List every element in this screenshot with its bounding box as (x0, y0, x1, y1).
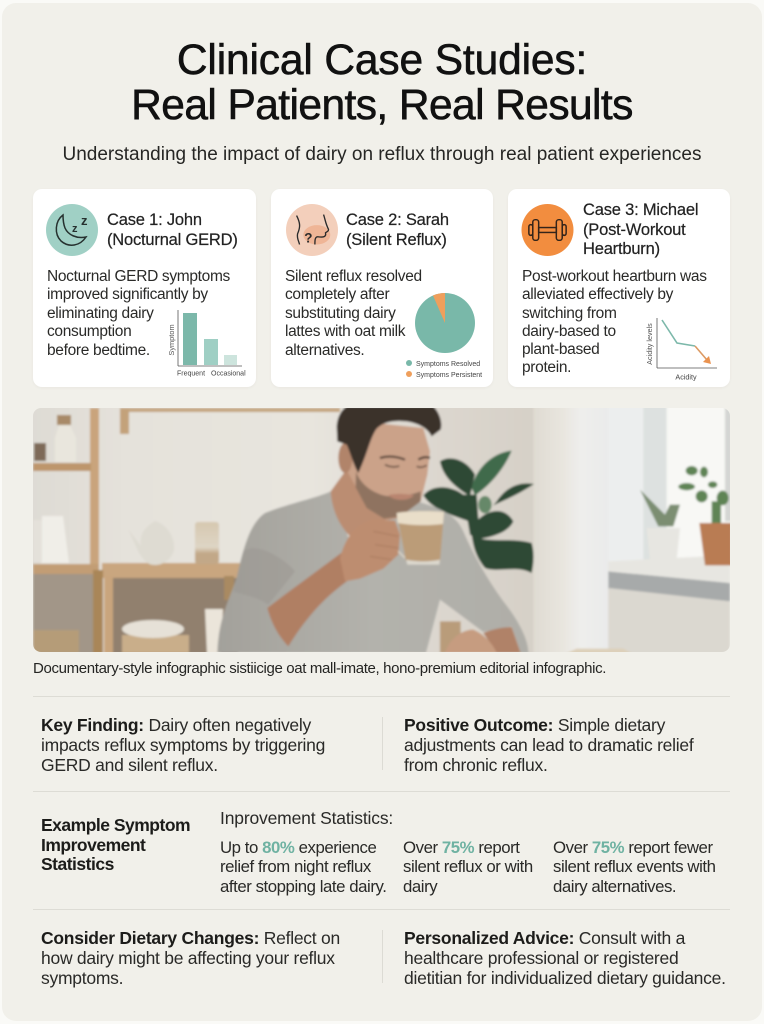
consider dietary changes: Consider Dietary Changes: Reflect on (41, 928, 340, 948)
panel: case 3 (508, 189, 730, 387)
case 2 text: completely after (285, 286, 389, 303)
line chart: acidity: Acidity (675, 372, 697, 382)
section: symptom statistics (41, 815, 190, 874)
case 2 heading: (Silent Reflux) (346, 230, 447, 248)
icon: throat profile: ? (304, 231, 313, 246)
personalized advice (404, 928, 726, 988)
case 3 text: switching from (522, 304, 617, 322)
statistic: 75 percent silent reflux: silent reflux or with (403, 857, 533, 876)
photo caption: Documentary-style infographic sistiicige oat mall-imate, hono-premium editorial infographic. (33, 660, 606, 677)
icon: throat profile (286, 204, 338, 256)
case 3 text: dairy-based to (522, 323, 616, 340)
positive outcome: adjustments can lead to dramatic relief (404, 735, 693, 755)
panel: case 1 (33, 189, 256, 387)
title (131, 37, 633, 129)
icon: moon and sleep: z (81, 213, 88, 228)
case 2 text: Silent reflux resolved (285, 268, 422, 285)
case 3 text (522, 268, 707, 376)
case 3 heading: Heartburn) (583, 240, 660, 258)
statistic: 75 percent silent reflux (403, 838, 533, 896)
positive outcome: Positive Outcome: Simple dietary (404, 715, 665, 735)
section: symptom statistics: Improvement (41, 835, 145, 855)
icon: moon and sleep (46, 204, 98, 256)
photo: man drinking an oat milk latte (33, 408, 730, 652)
chair (205, 609, 223, 654)
case 2 text: alternatives. (285, 342, 364, 359)
case 3 text: Post-workout heartburn was (522, 268, 707, 285)
left shelving (120, 408, 340, 412)
statistic: 80 percent (220, 838, 386, 896)
neck (331, 465, 398, 536)
statistics heading: Inprovement Statistics: (220, 808, 393, 828)
table edge (560, 649, 637, 656)
subtitle: Understanding the impact of dairy on reflux through real patient experiences (62, 144, 702, 165)
section: symptom statistics: Statistics (41, 854, 114, 874)
case 1 text: eliminating dairy (47, 305, 154, 322)
case 2 text: substituting dairy (285, 305, 396, 322)
case 3 text: protein. (522, 359, 571, 376)
panel: case 2 (271, 189, 493, 387)
statistic: 80 percent: Up to 80% experience (220, 838, 376, 857)
key finding (41, 715, 325, 775)
statistic: 80 percent: after stopping late dairy. (220, 877, 386, 896)
case 1 text (47, 268, 230, 359)
statistic: 75 percent fewer events: dairy alternatives. (553, 877, 676, 896)
statistic: 75 percent silent reflux: dairy (403, 877, 437, 896)
mug (398, 551, 405, 558)
case 1 text: before bedtime. (47, 342, 150, 359)
icon: dumbbell (522, 204, 574, 256)
consider dietary changes: symptoms. (41, 968, 123, 988)
key finding: impacts reflux symptoms by triggering (41, 735, 325, 755)
positive outcome: from chronic reflux. (404, 755, 548, 775)
bar chart: symptom frequency: Frequent (177, 370, 205, 378)
case 2 text (285, 268, 422, 359)
case 1 heading (107, 211, 238, 249)
case 3 text: alleviated effectively by (522, 286, 673, 303)
pie chart: Symptoms Resolved (416, 361, 480, 368)
case 3 heading: (Post-Workout (583, 220, 686, 238)
case 1 text: improved significantly by (47, 286, 208, 303)
case 1 text: consumption (47, 323, 131, 340)
section: symptom statistics: Example Symptom (41, 815, 190, 835)
case 3 heading: Case 3: Michael (583, 201, 698, 219)
lower hand (483, 627, 521, 653)
plant (423, 458, 534, 573)
case 3 text: plant-based (522, 341, 599, 358)
terracotta pot and leaves (678, 466, 729, 523)
hand (340, 520, 400, 581)
case 2 heading: Case 2: Sarah (346, 211, 449, 229)
statistic: 75 percent silent reflux: Over 75% report (403, 838, 520, 857)
bar chart: symptom frequency (167, 310, 246, 378)
pie chart (406, 293, 482, 379)
personalized advice: Personalized Advice: Consult with a (404, 928, 685, 948)
case 2 heading (346, 211, 449, 249)
personalized advice: healthcare professional or registered (404, 948, 678, 968)
hair (337, 406, 441, 473)
case 3 heading (583, 201, 698, 258)
consider dietary changes (41, 928, 340, 988)
bar chart: symptom frequency: Symptom (167, 324, 176, 356)
title: Real Patients, Real Results (131, 82, 633, 129)
case 1 heading: (Nocturnal GERD) (107, 230, 238, 248)
statistic: 75 percent fewer events (553, 838, 715, 896)
bar chart: symptom frequency: Occasional (211, 370, 246, 378)
statistic: 75 percent fewer events: Over 75% report fewer (553, 838, 713, 857)
consider dietary changes: how dairy might be affecting your reflux (41, 948, 335, 968)
head (340, 423, 430, 519)
key finding: Key Finding: Dairy often negatively (41, 715, 311, 735)
forearm (267, 551, 352, 646)
positive outcome (404, 715, 694, 775)
statistic: 80 percent: relief from night reflux (220, 857, 371, 876)
icon: moon and sleep: z (72, 223, 78, 235)
brows, eyes (380, 456, 430, 460)
jars and ceramics (57, 415, 71, 425)
line chart: acidity: Acidity levels (645, 323, 654, 365)
pie chart: Symptoms Persistent (416, 372, 482, 379)
white pot and grass (647, 528, 680, 560)
case 2 text: lattes with oat milk (285, 323, 405, 340)
case 1 text: Nocturnal GERD symptoms (47, 268, 230, 285)
sweater body and arm (217, 491, 528, 653)
title: Clinical Case Studies: (177, 37, 587, 84)
line chart: acidity (645, 318, 717, 382)
personalized advice: dietitian for individualized dietary guidance. (404, 968, 726, 988)
window and curtain (533, 405, 733, 658)
key finding: GERD and silent reflux. (41, 755, 218, 775)
case 1 heading: Case 1: John (107, 211, 202, 229)
statistic: 75 percent fewer events: silent reflux events with (553, 857, 715, 876)
